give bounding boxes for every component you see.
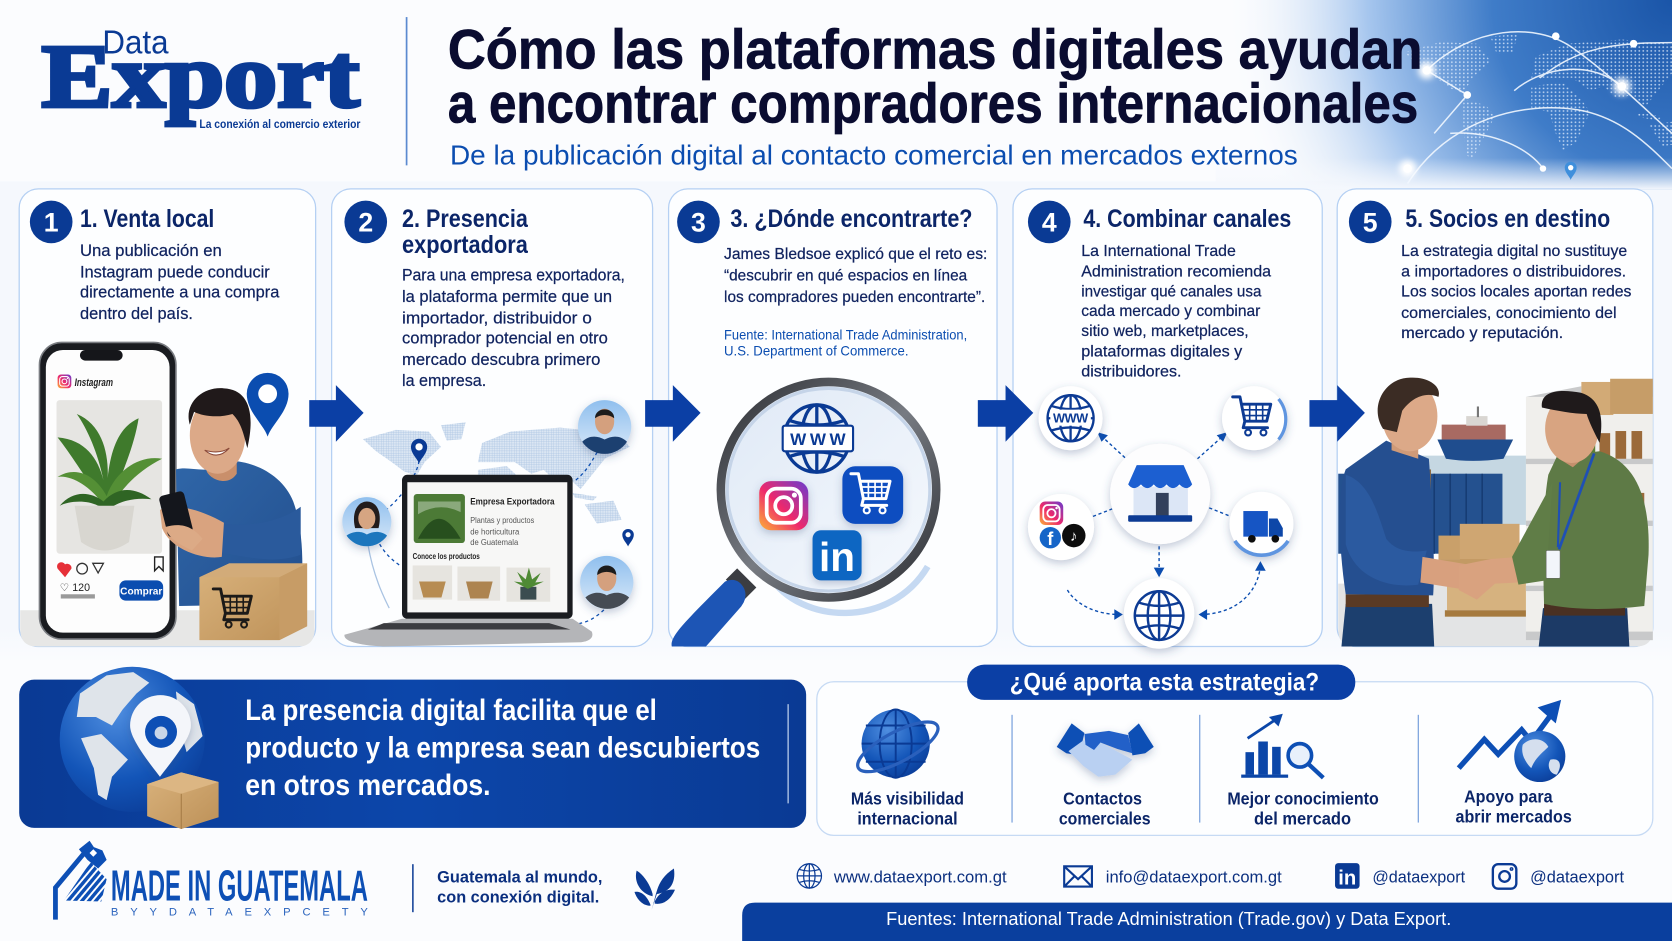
body text: La International Trade <box>1081 243 1236 260</box>
icon: linkedin <box>1335 863 1360 889</box>
node: website: WWW <box>1053 410 1089 425</box>
icon: location pin <box>247 373 289 437</box>
panel: 1 venta local <box>19 189 316 647</box>
body text: directamente a una compra <box>80 283 280 302</box>
stacked boxes <box>1438 524 1530 617</box>
heading: exportadora <box>402 232 528 259</box>
partner in green shirt <box>1459 391 1649 647</box>
contact row: @dataexport <box>1530 867 1624 886</box>
body text: La estrategia digital no sustituye <box>1401 243 1627 260</box>
arrow 3 to 4 <box>978 385 1033 442</box>
icon: leaf sprig <box>634 868 675 910</box>
body text: cada mercado y combinar <box>1081 303 1261 320</box>
panel heading pill: ¿Qué aporta esta estrategia? <box>1010 669 1319 696</box>
body text <box>1081 243 1271 381</box>
laptop: Empresa Exportadora <box>470 497 555 508</box>
table surface <box>20 610 315 647</box>
panel heading pill <box>967 665 1355 700</box>
node: social networks <box>1028 494 1094 560</box>
panel: 5 socios en destino <box>1337 189 1653 647</box>
avatar: buyer top right <box>578 400 631 454</box>
logo: Made in Guatemala <box>55 841 368 920</box>
icon: quetzal emblem <box>55 841 107 920</box>
arrow 4 to 5 <box>1309 385 1365 442</box>
node: social networks: f <box>1047 529 1054 549</box>
source bar: Fuentes: International Trade Administration (Trade.gov) y Data Export. <box>886 909 1451 929</box>
callout band <box>19 667 806 829</box>
body text <box>1401 243 1631 342</box>
icon: globe visibility <box>851 709 944 781</box>
icon: mail <box>1064 866 1092 887</box>
man with phone <box>158 388 302 606</box>
callout text: en otros mercados. <box>245 769 491 802</box>
body text: comprador potencial en otro <box>402 329 608 348</box>
icon: linkedin: in <box>1338 867 1356 889</box>
node: distributor truck <box>1229 492 1293 556</box>
number badge 4: 4 <box>1042 208 1057 238</box>
icon: map pins <box>411 439 634 547</box>
node: global market <box>1124 578 1194 649</box>
node: marketplace cart <box>1222 386 1286 450</box>
number badge 2 <box>344 201 387 243</box>
body text: distribuidores. <box>1081 364 1181 381</box>
icon: linkedin <box>813 530 862 580</box>
title: a encontrar compradores internacionales <box>448 73 1418 135</box>
body text: la empresa. <box>402 371 486 390</box>
source bar <box>742 903 1672 941</box>
icon: web globe <box>797 864 821 888</box>
body text: dentro del país. <box>80 304 193 323</box>
node: storefront centre <box>1110 444 1210 544</box>
icon: growth arrow and globe <box>1459 700 1565 782</box>
pale band behind cards <box>0 181 1672 661</box>
panel: 4 combinar canales <box>1013 189 1322 649</box>
source note: Fuente: International Trade Administration, <box>724 326 967 342</box>
magnifying glass <box>672 382 936 647</box>
icon: instagram <box>1493 864 1516 889</box>
body text <box>80 241 280 323</box>
contact row: info@dataexport.com.gt <box>1106 867 1282 886</box>
heading <box>402 206 528 259</box>
quote text <box>724 246 987 306</box>
body text: mercado descubra primero <box>402 350 600 369</box>
cardboard box with cart <box>199 563 307 640</box>
panel: 2 presencia exportadora <box>332 189 653 647</box>
body text: a importadores o distribuidores. <box>1401 263 1626 280</box>
contact row <box>797 863 1624 889</box>
icon: www globe <box>783 405 853 472</box>
body text: plataformas digitales y <box>1081 343 1242 360</box>
label: visibility: internacional <box>857 809 958 829</box>
laptop <box>344 475 592 647</box>
connector arrowheads <box>1097 432 1266 620</box>
contact row: @dataexport <box>1372 867 1466 886</box>
heading: 1. Venta local <box>80 206 214 233</box>
body text: Administration recomienda <box>1081 263 1271 280</box>
logo: Made in Guatemala: MADE IN GUATEMALA <box>111 861 368 910</box>
callout text <box>245 694 760 802</box>
heading: 4. Combinar canales <box>1083 206 1291 233</box>
container ship <box>1437 406 1513 461</box>
body text: Una publicación en <box>80 241 222 260</box>
label: contacts <box>1059 788 1151 829</box>
body text: Instagram puede conducir <box>80 262 270 281</box>
body text: Para una empresa exportadora, <box>402 266 625 285</box>
body text: investigar qué canales usa <box>1081 284 1262 301</box>
icon: linkedin: in <box>819 534 855 580</box>
laptop: de horticultura <box>470 528 520 537</box>
channel connectors <box>1067 433 1260 615</box>
number badge 3 <box>677 201 720 243</box>
shipping container <box>1338 469 1502 555</box>
body text: comerciales, conocimiento del <box>1401 305 1617 322</box>
phone with Instagram post <box>39 342 176 639</box>
label: visibility: Más visibilidad <box>851 788 964 808</box>
node: website <box>1039 386 1103 450</box>
title: Cómo las plataformas digitales ayudan <box>448 18 1422 80</box>
node: social networks: ♪ <box>1070 528 1078 545</box>
body text: sitio web, marketplaces, <box>1081 323 1249 340</box>
laptop: de Guatemala <box>470 538 519 547</box>
phone with Instagram post: Instagram <box>75 377 113 389</box>
tagline <box>437 867 602 907</box>
like row <box>57 557 163 599</box>
callout text: producto y la empresa sean descubiertos <box>245 731 760 764</box>
comprar button <box>119 580 163 601</box>
label: contacts: Contactos <box>1063 788 1142 808</box>
icon: shopping cart tile <box>842 466 903 524</box>
body text: Los socios locales aportan redes <box>1401 284 1631 301</box>
avatar: buyer left <box>342 497 391 546</box>
body text <box>402 266 625 390</box>
laptop: Conoce los productos <box>413 551 480 561</box>
warehouse shelves <box>1526 379 1653 640</box>
icon: chart with magnifier <box>1241 714 1323 778</box>
number badge 4 <box>1028 201 1071 243</box>
quote text: “descubrir en qué espacios en línea <box>724 268 967 285</box>
tagline: con conexión digital. <box>437 888 599 907</box>
callout text: La presencia digital facilita que el <box>245 694 657 727</box>
label: contacts: comerciales <box>1059 809 1151 829</box>
avatar: buyer bottom right <box>580 556 633 609</box>
connection lines <box>368 452 606 624</box>
header network background <box>1216 0 1672 190</box>
number badge 5: 5 <box>1363 208 1378 238</box>
label: open markets <box>1456 786 1572 827</box>
contact row: www.dataexport.com.gt <box>833 867 1007 886</box>
source note: U.S. Department of Commerce. <box>724 342 909 358</box>
panel: qué aporta esta estrategia <box>817 665 1653 835</box>
panel: 3 dónde encontrarte <box>669 189 997 647</box>
number badge 1: 1 <box>44 208 59 238</box>
laptop: Plantas y productos <box>470 516 534 525</box>
label: open markets: Apoyo para <box>1464 786 1553 806</box>
icon: www globe: WWW <box>790 430 847 449</box>
body text: mercado y reputación. <box>1401 325 1563 342</box>
label: market knowledge: Mejor conocimiento <box>1227 788 1379 808</box>
number badge 1 <box>30 201 73 243</box>
like row: ♡ 120 <box>60 582 90 594</box>
world map <box>363 422 630 535</box>
heading: 5. Socios en destino <box>1405 206 1610 233</box>
handshake scene <box>1338 378 1653 647</box>
quote text: los compradores pueden encontrarte”. <box>724 289 985 306</box>
icon: instagram <box>759 481 808 530</box>
title <box>448 18 1422 135</box>
quote text: James Bledsoe explicó que el reto es: <box>724 246 987 263</box>
subtitle: De la publicación digital al contacto comercial en mercados externos <box>450 139 1298 170</box>
number badge 5 <box>1349 201 1392 243</box>
source note <box>724 326 967 358</box>
label: market knowledge <box>1227 788 1379 829</box>
logo: Data Export: La conexión al comercio exterior <box>199 118 361 131</box>
icon: handshake <box>1057 723 1154 777</box>
logo: Data Export: Data <box>102 24 169 61</box>
logo: Data Export: Export <box>42 28 360 127</box>
partner in blue shirt <box>1340 378 1467 647</box>
label: market knowledge: del mercado <box>1254 809 1351 829</box>
arrow 2 to 3 <box>645 385 701 442</box>
heading: 2. Presencia <box>402 206 528 233</box>
body text: la plataforma permite que un <box>402 287 612 306</box>
tagline: Guatemala al mundo, <box>437 867 602 886</box>
label: visibility <box>851 788 964 829</box>
number badge 2: 2 <box>358 208 373 238</box>
plant <box>58 414 162 551</box>
body text: importador, distribuidor o <box>402 308 592 327</box>
label: open markets: abrir mercados <box>1456 807 1572 827</box>
globe with pin and box <box>60 667 219 829</box>
logo: Made in Guatemala: BYYDATAEXPCETY <box>111 906 368 918</box>
arrow 1 to 2 <box>309 385 364 442</box>
comprar button: Comprar <box>120 586 162 597</box>
number badge 3: 3 <box>691 208 706 238</box>
heading: 3. ¿Dónde encontrarte? <box>730 206 972 233</box>
